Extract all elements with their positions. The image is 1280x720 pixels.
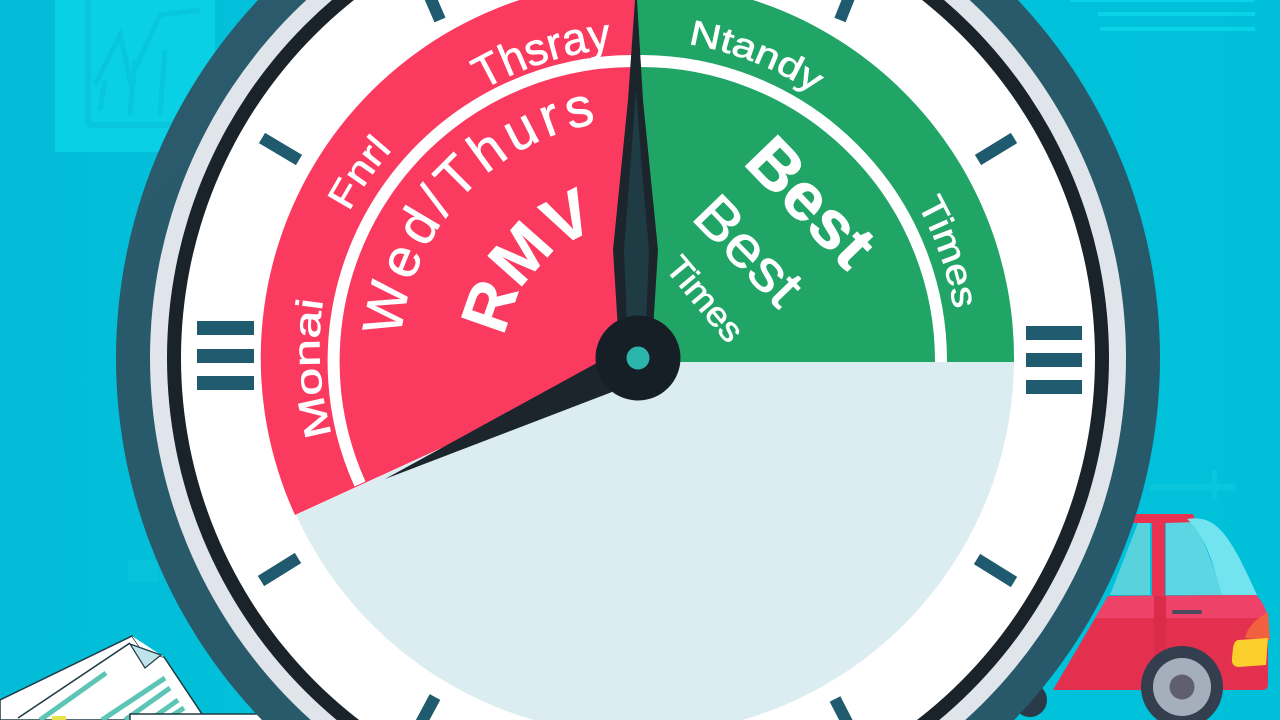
label: Ntandy: Ntandy xyxy=(691,20,824,92)
car rear wheel xyxy=(1141,646,1223,720)
label: Fnrl: Fnrl xyxy=(328,134,391,210)
clock hub centre xyxy=(626,346,650,370)
tick marks xyxy=(261,0,1014,720)
icon: red car xyxy=(1013,514,1270,720)
car windows xyxy=(1110,523,1150,595)
document lines xyxy=(40,673,184,720)
car roof and pillar xyxy=(1133,514,1194,596)
label: Best regular: Best xyxy=(681,182,816,319)
minute hand xyxy=(613,0,658,330)
clock black ring xyxy=(167,0,1109,720)
car body xyxy=(1053,595,1268,690)
pale sector xyxy=(296,358,1014,720)
green inner arc xyxy=(640,61,941,362)
green sector xyxy=(636,0,1014,362)
icon: documents xyxy=(0,636,288,720)
label: Wed/Thurs: Wed/Thurs xyxy=(362,96,594,330)
label: Thsray: Thsray xyxy=(468,24,609,85)
right triple bars xyxy=(1026,326,1082,394)
clock silver ring xyxy=(150,0,1126,720)
car tail light xyxy=(1245,612,1270,640)
label: Best bold: Best xyxy=(732,121,891,282)
background ghost lines top right xyxy=(1070,0,1255,31)
background ghost chart panel xyxy=(55,0,215,152)
label: Monai: Monai xyxy=(294,300,331,438)
document yellow mark xyxy=(52,716,66,720)
car door handle xyxy=(1172,610,1202,614)
label: Times outer: Times xyxy=(922,192,972,308)
background ghost marks lower right xyxy=(128,470,1236,582)
clock hub xyxy=(596,316,680,400)
document sheet xyxy=(0,636,206,720)
left triple bars xyxy=(197,321,254,390)
red inner arc xyxy=(334,61,636,484)
car headlight xyxy=(1232,638,1268,667)
second document xyxy=(130,714,288,720)
car front wheel xyxy=(1020,688,1047,717)
hour hand xyxy=(385,359,612,479)
red sector xyxy=(261,0,638,515)
label: RMV: RMV xyxy=(461,186,582,333)
label: Times inner: Times xyxy=(658,249,751,350)
clock face xyxy=(181,0,1095,720)
document fold xyxy=(130,644,161,668)
